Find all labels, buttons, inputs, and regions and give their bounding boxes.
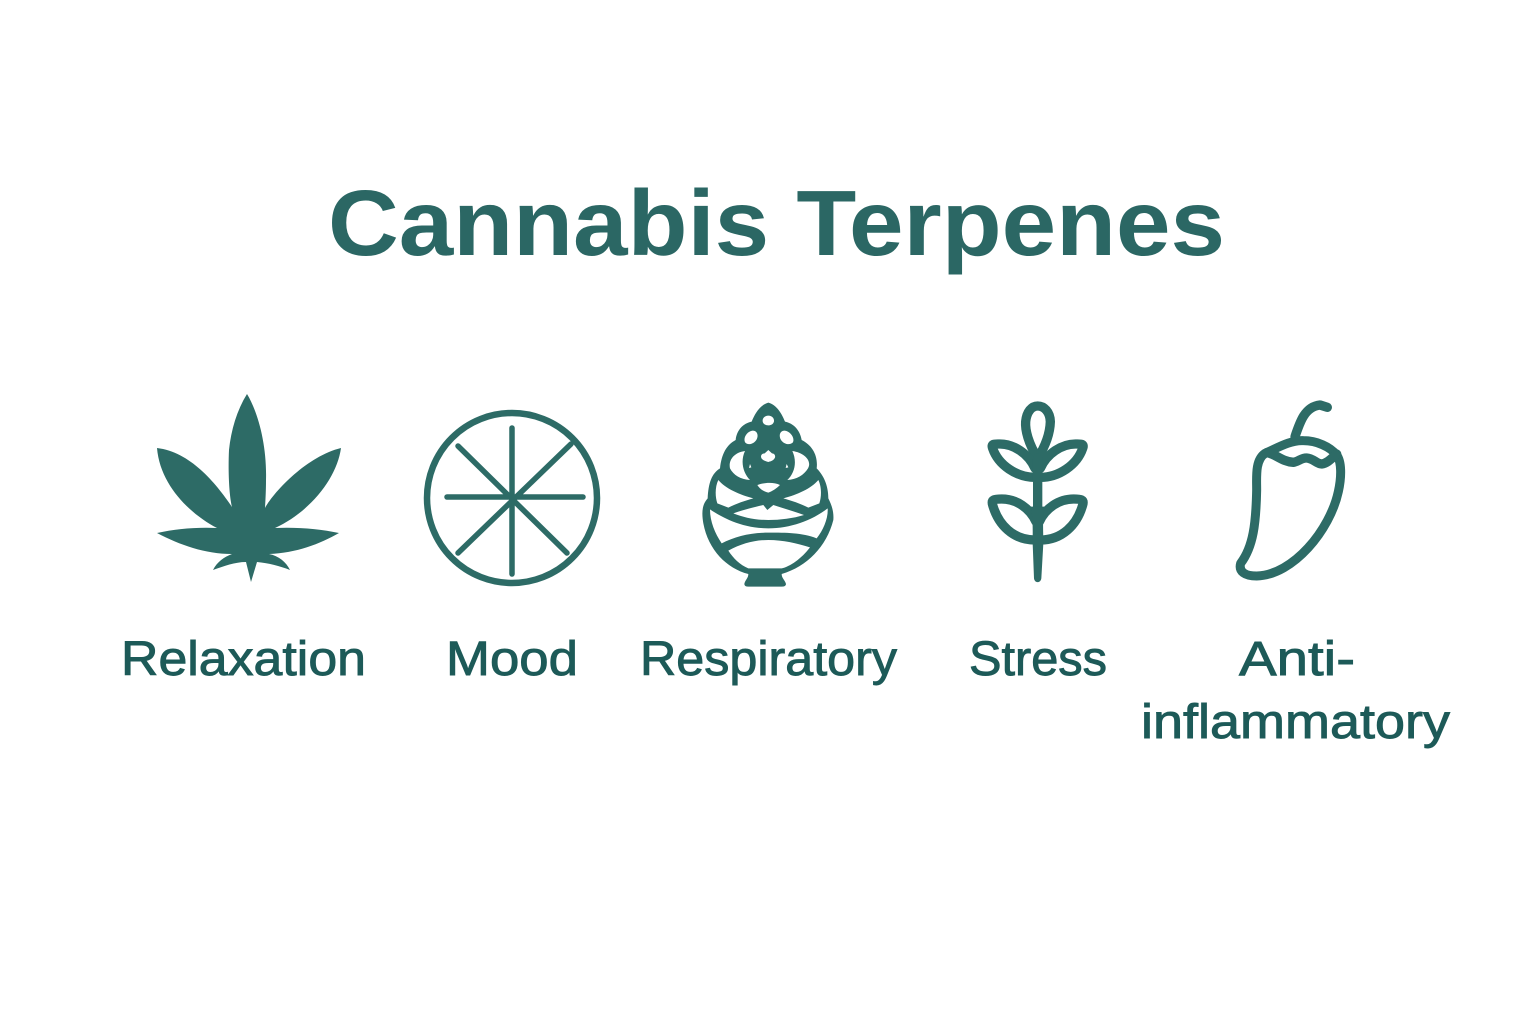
label: mood: Mood xyxy=(446,633,578,686)
label: relaxation: Relaxation xyxy=(121,633,366,686)
icon: wheel xyxy=(427,413,597,583)
panel: mood xyxy=(427,413,597,686)
panel: stress xyxy=(969,406,1107,686)
label: stress: Stress xyxy=(969,633,1107,686)
label: respiratory: Respiratory xyxy=(640,633,897,686)
icon: herb sprig xyxy=(992,406,1083,582)
title: Cannabis Terpenes xyxy=(328,171,1225,275)
panel: respiratory xyxy=(640,403,897,686)
panel: relaxation xyxy=(121,394,366,686)
label: anti-inflammatory: inflammatory xyxy=(1141,696,1450,749)
icon: pine cone xyxy=(702,403,833,587)
icon: chili pepper xyxy=(1240,405,1341,576)
label: anti-inflammatory: Anti- xyxy=(1239,633,1355,686)
icon: cannabis leaf xyxy=(157,394,341,582)
panel: anti-inflammatory xyxy=(1141,405,1450,749)
